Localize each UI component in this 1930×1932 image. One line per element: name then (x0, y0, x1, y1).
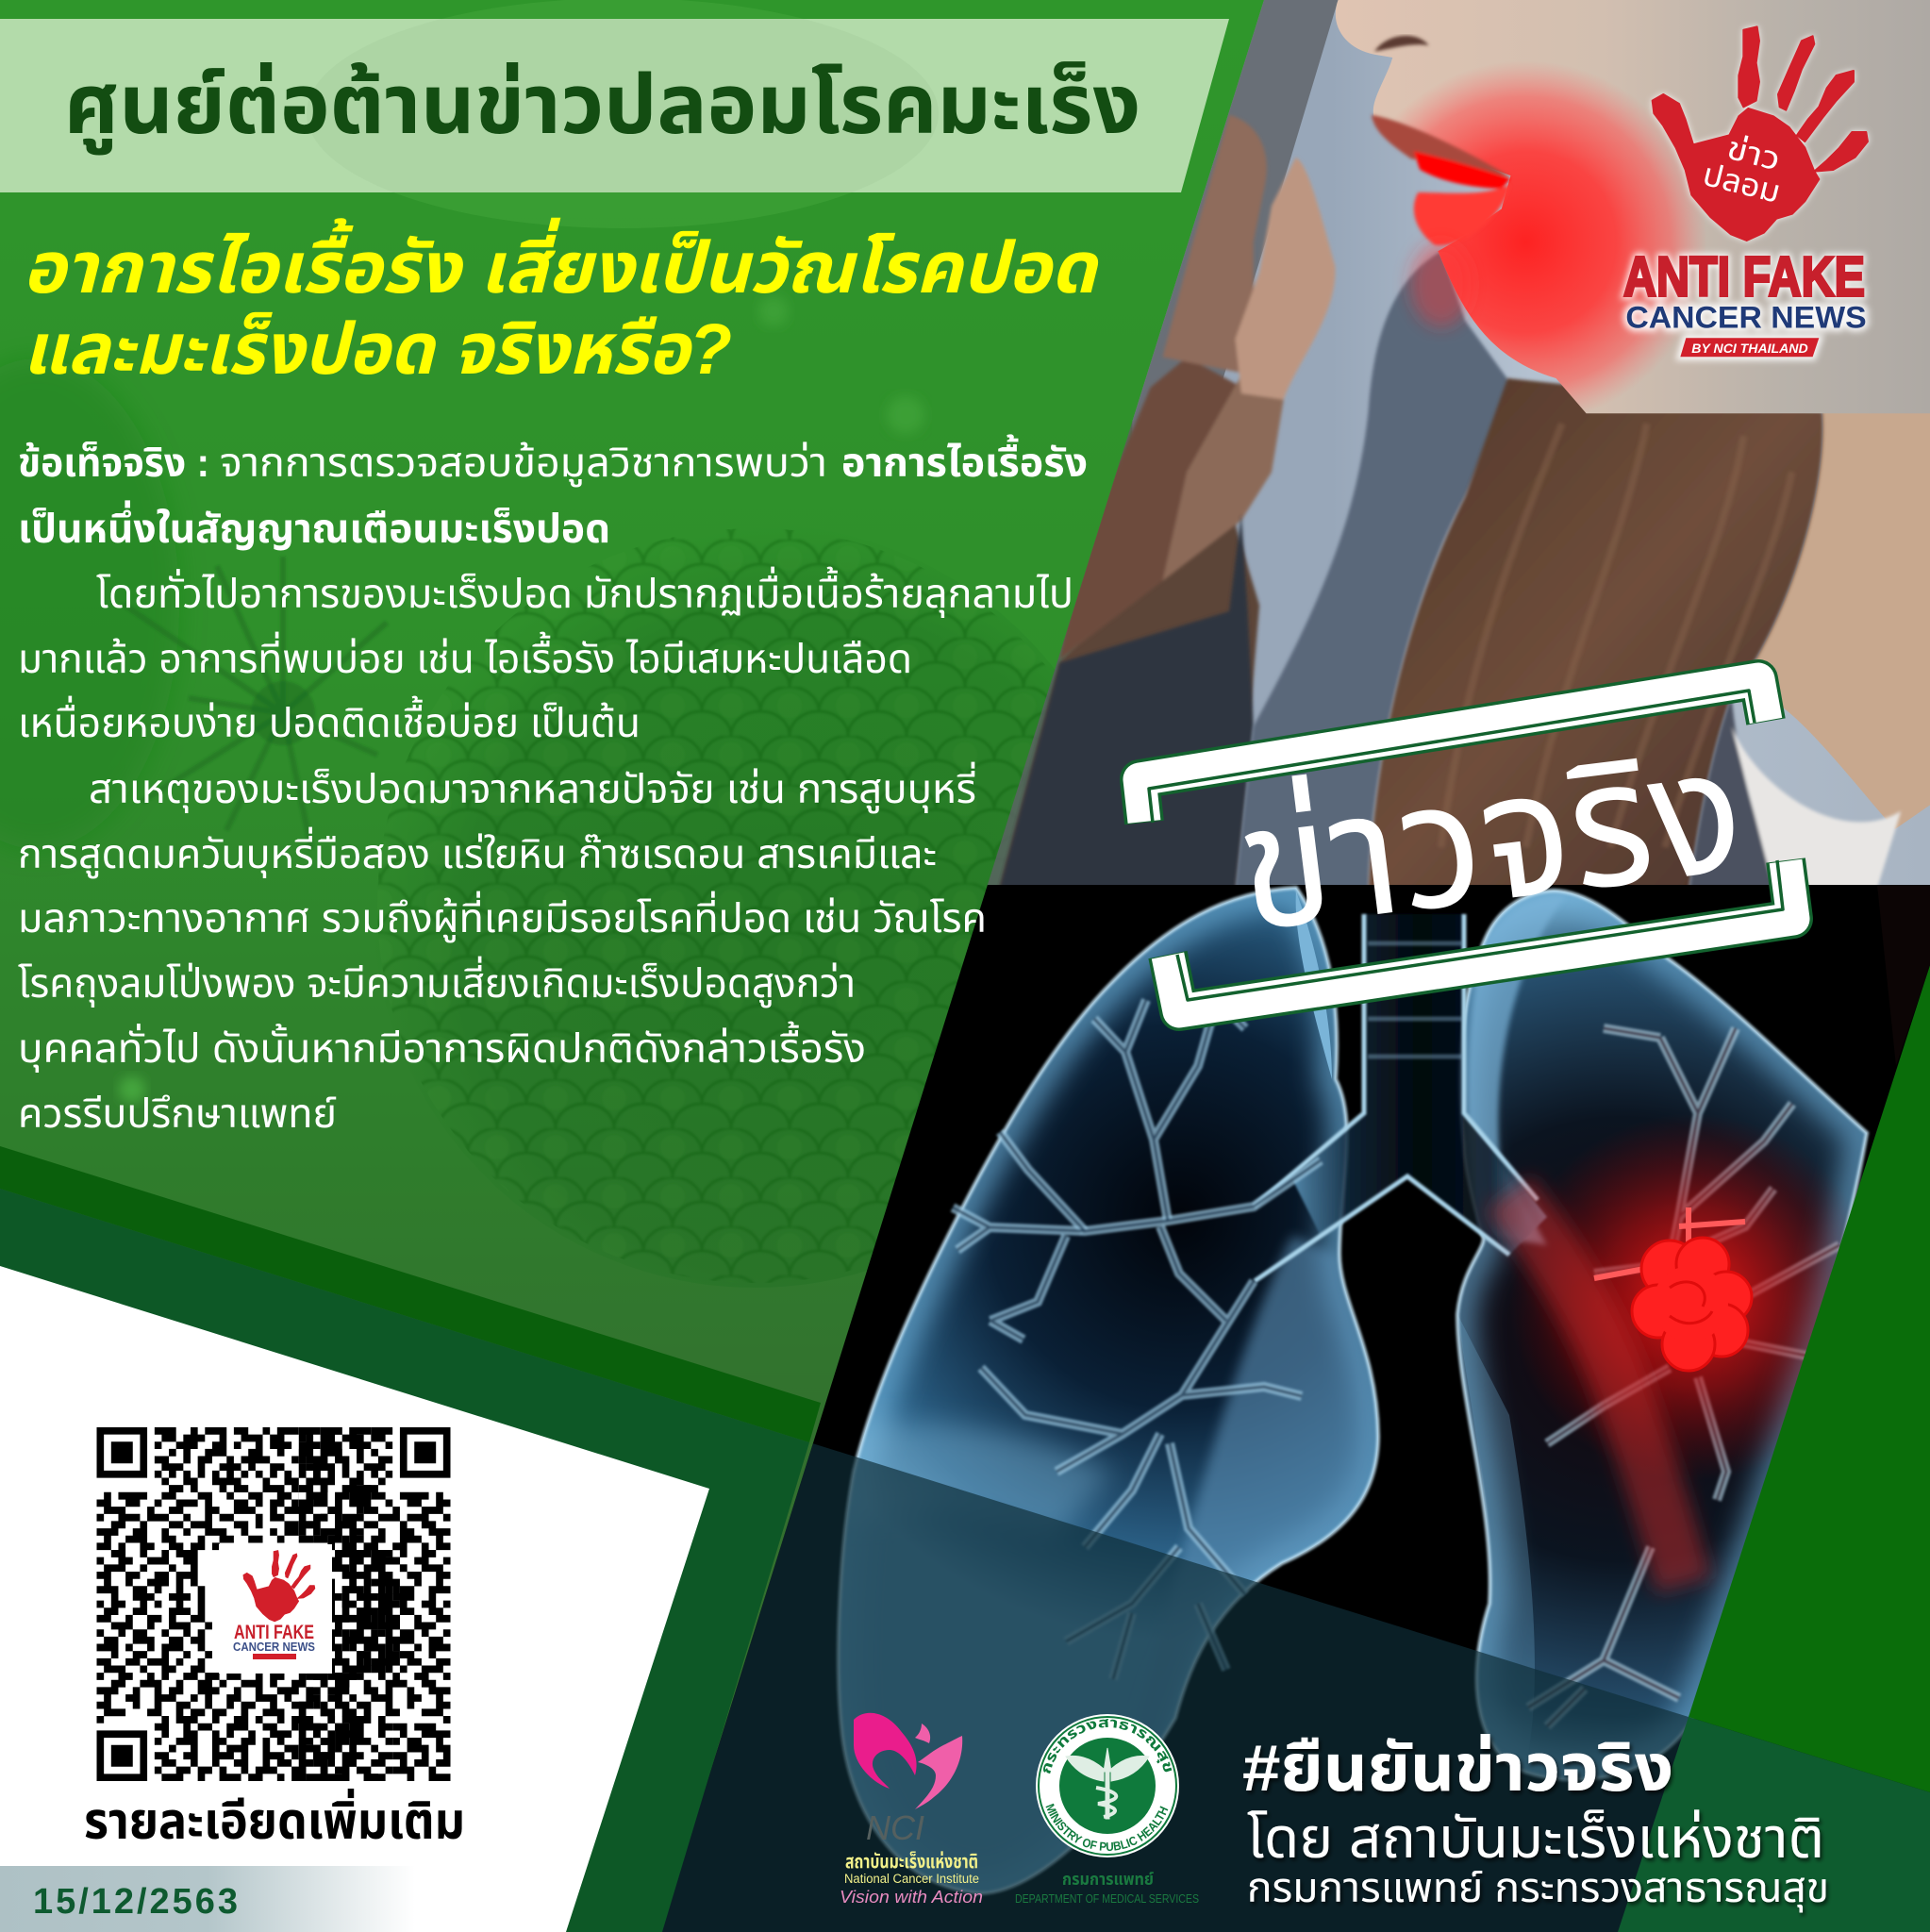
logo white glow: CANCER NEWS (1625, 301, 1867, 335)
NCI english name: National Cancer Institute (844, 1872, 979, 1886)
lungs illustration (839, 888, 1877, 1893)
QR centre logo: CANCER NEWS (233, 1640, 315, 1654)
left lung (839, 888, 1378, 1893)
background: blurred cell shapes (0, 0, 939, 1103)
right green corner (1689, 965, 1930, 1792)
dark jacket (999, 514, 1254, 890)
lower left teal green band (0, 1189, 809, 1932)
hair (1369, 378, 1823, 890)
body text: มากแล้ว อาการที่พบบ่อย เช่น ไอเรื้อรัง ไอมีเสมหะปนเลือด (18, 631, 912, 682)
bronchial tree right (1528, 1028, 1839, 1726)
body text (18, 434, 1088, 1137)
ministry of public health seal (1015, 1714, 1199, 1906)
seal english text: MINISTRY OF PUBLIC HEALTH (1045, 1804, 1168, 1851)
vision with action: Vision with Action (840, 1888, 983, 1907)
hashtag and institute credits: #ยืนยันข่าวจริง (1242, 1731, 1673, 1805)
yellow question headline: อาการไอเรื้อรัง เสี่ยงเป็นวัณโรคปอด (23, 218, 1099, 308)
hashtag and institute credits: กรมการแพทย์ กระทรวงสาธารณสุข (1247, 1865, 1829, 1913)
white QR panel (0, 1266, 709, 1932)
right lung (1457, 891, 1867, 1780)
hair strands (1441, 424, 1792, 847)
more details label: รายละเอียดเพิ่มเติม (84, 1789, 465, 1850)
photo: woman coughing (981, 0, 1930, 896)
tumour (1632, 1238, 1752, 1371)
pink butterfly mark (854, 1713, 962, 1809)
face (1336, 0, 1930, 413)
department thai name: กรมการแพทย์ (1062, 1870, 1154, 1889)
date band (0, 1866, 415, 1932)
trachea and main bronchi (1254, 914, 1547, 1281)
department english name: DEPARTMENT OF MEDICAL SERVICES (1015, 1891, 1199, 1906)
by nci tag (1680, 338, 1819, 357)
hashtag and institute credits (1242, 1731, 1829, 1913)
lungs panel black background (660, 885, 1930, 1932)
hand text: ข่าว (1723, 130, 1784, 178)
stamp bottom bracket (1168, 860, 1793, 1011)
right image panel (660, 0, 1930, 1932)
neck red spill (1411, 242, 1472, 326)
hand (1059, 115, 1335, 659)
yellow question headline (23, 218, 1099, 390)
stamp top bracket (1140, 679, 1766, 823)
body text: จากการตรวจสอบข้อมูลวิชาการพบว่า (220, 441, 827, 487)
nostril (1374, 36, 1429, 52)
hashtag and institute credits: โดย สถาบันมะเร็งแห่งชาติ (1247, 1807, 1824, 1870)
body text: โดยทั่วไปอาการของมะเร็งปอด มักปรากฏเมื่อเนื้อร้ายลุกลามไป (96, 566, 1073, 618)
bronchial tree left (953, 1000, 1321, 1679)
body text: โรคถุงลมโป่งพอง จะมีความเสี่ยงเกิดมะเร็งปอดสูงกว่า (18, 956, 856, 1008)
header band (0, 0, 1229, 228)
tumour glow and red bronchus (1509, 1113, 1877, 1585)
body text: มลภาวะทางอากาศ รวมถึงผู้ที่เคยมีรอยโรคที่ปอด เช่น วัณโรค (18, 891, 987, 942)
QR centre logo: ANTI FAKE (234, 1622, 314, 1643)
chest skin (1756, 413, 1930, 829)
red inflammation glow (1400, 66, 1701, 408)
title: ศูนย์ต่อต้านข่าวปลอมโรคมะเร็ง (64, 58, 1140, 156)
date band: 15/12/2563 (33, 1882, 238, 1922)
cancer news wordmark: CANCER NEWS (1625, 301, 1867, 335)
hand text (1699, 126, 1791, 210)
QR modules (96, 1427, 451, 1781)
stamp text: ข่าวจริง (1228, 713, 1753, 968)
NCI logo (840, 1713, 983, 1907)
dark edge right of lungs (1877, 885, 1930, 1066)
body text: การสูดดมควันบุหรี่มือสอง แร่ใยหิน ก๊าซเรดอน สารเคมีและ (18, 826, 937, 878)
body text: บุคคลทั่วไป ดังนั้นหากมีอาการผิดปกติดังกล่าวเรื้อรัง (18, 1021, 866, 1073)
body text: เหนื่อยหอบง่าย ปอดติดเชื้อบ่อย เป็นต้น (18, 695, 641, 746)
background: spiked virus (123, 557, 387, 849)
hand text: ปลอม (1699, 158, 1784, 210)
logo white glow (1623, 26, 1868, 357)
body text: อาการไอเรื้อรัง (841, 434, 1088, 486)
stamp: true news (1140, 679, 1793, 1011)
NCI thai name: สถาบันมะเร็งแห่งชาติ (845, 1851, 978, 1873)
body text: ควรรีบปรึกษาแพทย์ (18, 1091, 337, 1137)
seal thai text: กระทรวงสาธารณสุข (1043, 1719, 1172, 1774)
body text: ข้อเท็จจริง : (18, 441, 209, 486)
dark teal diagonal overlay (660, 1442, 1930, 1932)
yellow question headline: และมะเร็งปอด จริงหรือ? (23, 309, 732, 390)
right collar and shirt (1689, 696, 1901, 890)
lower left dark green band (0, 1146, 821, 1442)
body text: สาเหตุของมะเร็งปอดมาจากหลายปัจจัย เช่น การสูบบุหรี่ (89, 761, 976, 813)
anti fake cancer news logo (1623, 26, 1868, 357)
QR code (96, 1427, 451, 1781)
grey blue scarf (1235, 251, 1514, 890)
anti fake wordmark: ANTI FAKE (1623, 244, 1865, 308)
QR centre logo (219, 1544, 332, 1674)
logo white glow: ANTI FAKE (1623, 244, 1865, 308)
by nci tag: BY NCI THAILAND (1691, 341, 1808, 356)
NCI italic: NCI (866, 1808, 924, 1847)
body text: เป็นหนึ่งในสัญญาณเตือนมะเร็งปอด (18, 500, 610, 552)
red hand (1653, 26, 1868, 241)
right green corner lower part (1618, 1717, 1930, 1932)
background: virus ball (377, 528, 1049, 1283)
lips (1372, 115, 1510, 245)
caduceus (1066, 1748, 1149, 1819)
